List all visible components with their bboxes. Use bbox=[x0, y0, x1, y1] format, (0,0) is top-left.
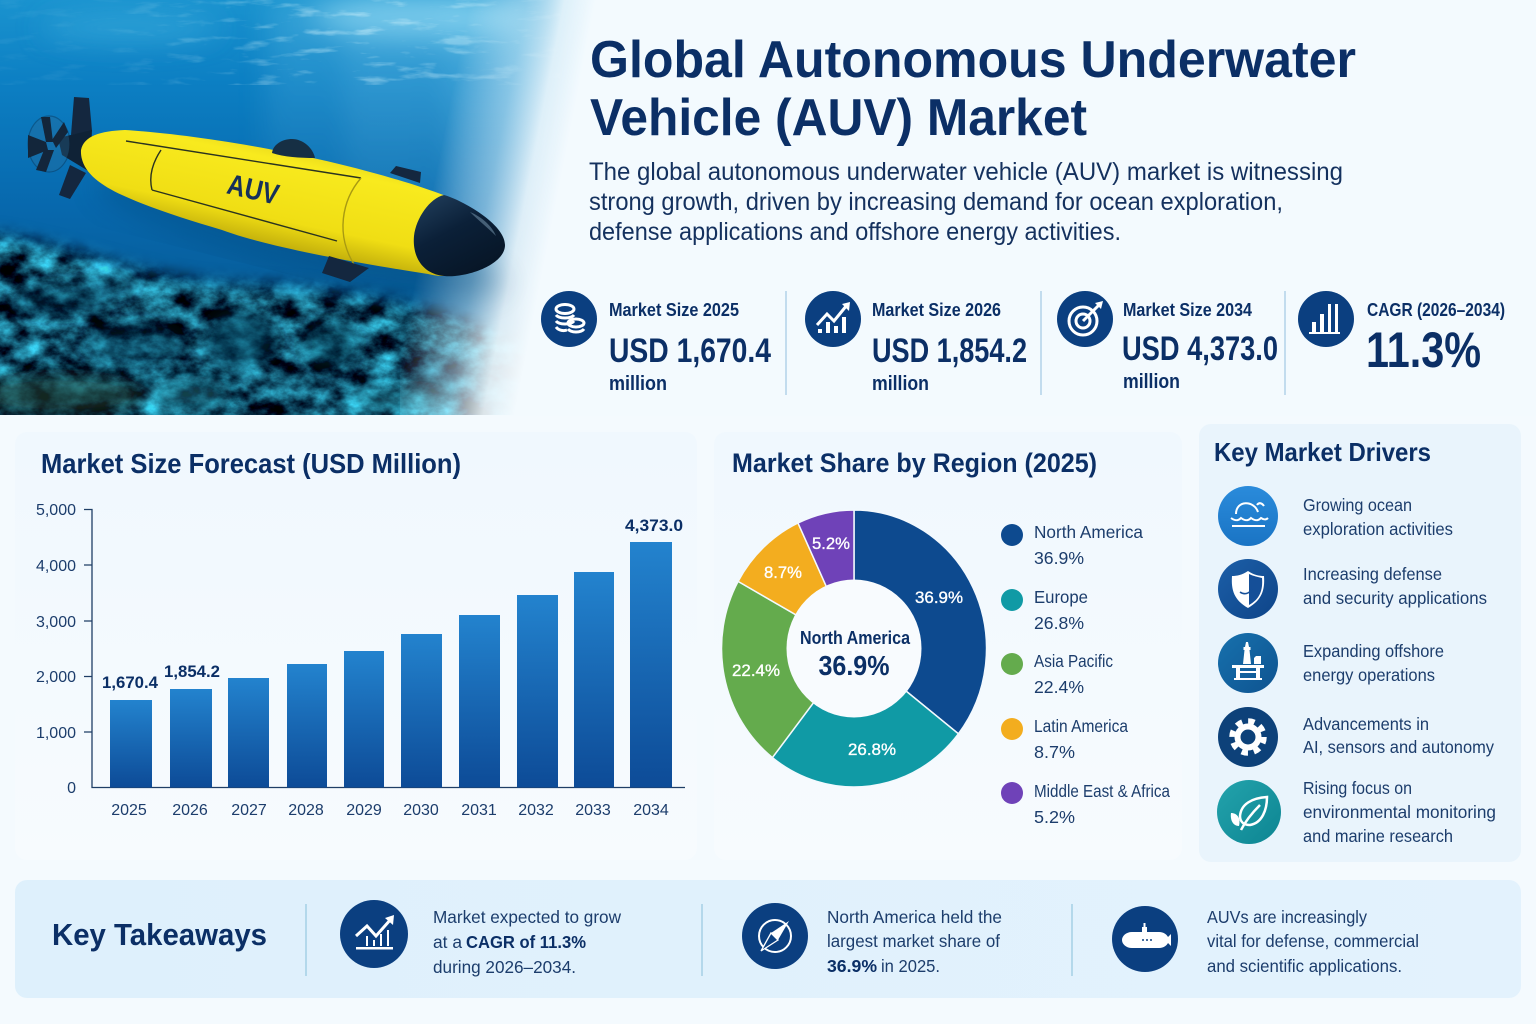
hero photo: AUV underwater bbox=[0, 0, 600, 416]
takeaway text: during 2026–2034. bbox=[433, 957, 576, 977]
icon: offshore rig bbox=[1218, 633, 1278, 693]
stat: CAGR: CAGR (2026–2034) bbox=[1367, 300, 1505, 320]
takeaway text: CAGR of 11.3% bbox=[466, 932, 586, 952]
legend: Asia Pacific bbox=[1034, 651, 1113, 671]
legend: 8.7% bbox=[1034, 742, 1075, 762]
nose cone bbox=[414, 195, 505, 276]
takeaway text: vital for defense, commercial bbox=[1207, 931, 1419, 951]
bar chart: 2029 bbox=[346, 802, 382, 819]
title bbox=[590, 31, 1356, 147]
bar chart: 2034 bbox=[633, 802, 669, 819]
driver text: and marine research bbox=[1303, 826, 1453, 846]
stat: market size 2034: Market Size 2034 bbox=[1123, 300, 1252, 320]
side fins bbox=[390, 166, 421, 183]
driver text: energy operations bbox=[1303, 665, 1435, 685]
legend: North America bbox=[1034, 522, 1143, 542]
driver text: exploration activities bbox=[1303, 519, 1453, 539]
chart heading: Market Size Forecast (USD Million) bbox=[41, 448, 461, 479]
bar chart: 2025 bbox=[111, 802, 147, 819]
donut chart: 8.7% bbox=[764, 563, 802, 582]
driver text: Expanding offshore bbox=[1303, 641, 1444, 661]
legend: Middle East & Africa bbox=[1034, 781, 1170, 801]
stat: CAGR bbox=[1298, 291, 1505, 378]
bar chart: 2031 bbox=[461, 802, 497, 819]
takeaways heading: Key Takeaways bbox=[52, 917, 267, 952]
bar chart: 2030 bbox=[403, 802, 439, 819]
bar chart: 1,670.4 bbox=[102, 673, 159, 692]
donut chart: 5.2% bbox=[812, 534, 850, 553]
sensor dome bbox=[272, 139, 315, 158]
bar chart bbox=[36, 502, 685, 819]
stat: market size 2026: million bbox=[872, 373, 929, 395]
stat: market size 2025: USD 1,670.4 bbox=[609, 332, 771, 370]
donut chart bbox=[722, 510, 987, 787]
stat: market size 2025 bbox=[541, 291, 771, 395]
icon: bars bbox=[1298, 291, 1354, 347]
AUV lettering: AUV bbox=[224, 169, 282, 212]
propeller bbox=[28, 116, 70, 172]
panel: market share by region bbox=[714, 432, 1182, 860]
intro text bbox=[589, 158, 1343, 246]
panel: key takeaways bbox=[15, 880, 1521, 998]
driver text: Rising focus on bbox=[1303, 778, 1412, 798]
driver text: AI, sensors and autonomy bbox=[1303, 737, 1494, 757]
icon: compass bbox=[742, 903, 808, 969]
driver text bbox=[1303, 778, 1496, 846]
bar chart: 2,000 bbox=[36, 669, 76, 686]
bar chart: 0 bbox=[67, 780, 76, 797]
driver text: environmental monitoring bbox=[1303, 802, 1496, 822]
intro text: The global autonomous underwater vehicle (AUV) market is witnessing bbox=[589, 158, 1343, 186]
donut chart: 26.8% bbox=[848, 740, 896, 759]
takeaway text: and scientific applications. bbox=[1207, 956, 1402, 976]
driver text: Growing ocean bbox=[1303, 495, 1412, 515]
icon: growth chart bbox=[340, 900, 408, 968]
donut chart: North America bbox=[800, 628, 911, 648]
takeaway text bbox=[433, 907, 621, 977]
legend: 36.9% bbox=[1034, 548, 1084, 568]
driver text: Increasing defense bbox=[1303, 564, 1442, 584]
takeaway text: North America held the bbox=[827, 907, 1002, 927]
donut chart: 36.9% bbox=[915, 588, 963, 607]
stat: market size 2025: Market Size 2025 bbox=[609, 300, 739, 320]
icon: shield bbox=[1218, 559, 1278, 619]
legend: 26.8% bbox=[1034, 613, 1084, 633]
takeaway text: in 2025. bbox=[881, 956, 940, 976]
bar chart: 3,000 bbox=[36, 614, 76, 631]
stat: market size 2026 bbox=[805, 291, 1027, 395]
icon: leaf bbox=[1217, 780, 1281, 844]
icon: rising chart bbox=[805, 291, 861, 347]
driver text bbox=[1303, 495, 1453, 539]
drivers heading: Key Market Drivers bbox=[1214, 437, 1431, 467]
takeaway text: at a bbox=[433, 932, 462, 952]
legend: Latin America bbox=[1034, 716, 1128, 736]
bar chart: 2033 bbox=[575, 802, 611, 819]
bar chart: 4,373.0 bbox=[625, 516, 683, 535]
takeaway text: Market expected to grow bbox=[433, 907, 621, 927]
driver text bbox=[1303, 714, 1494, 757]
bar chart: 2026 bbox=[172, 802, 208, 819]
driver text: and security applications bbox=[1303, 588, 1487, 608]
stat: market size 2025: million bbox=[609, 373, 667, 395]
driver text bbox=[1303, 641, 1444, 685]
legend: 5.2% bbox=[1034, 807, 1075, 827]
AUV vehicle bbox=[28, 97, 512, 319]
bar chart: 4,000 bbox=[36, 558, 76, 575]
driver text bbox=[1303, 564, 1487, 608]
stat: market size 2026: Market Size 2026 bbox=[872, 300, 1001, 320]
stat: market size 2034 bbox=[1057, 291, 1278, 393]
header background bbox=[0, 0, 1536, 416]
icon: target bbox=[1057, 291, 1113, 347]
takeaway text: largest market share of bbox=[827, 931, 1000, 951]
legend: 22.4% bbox=[1034, 677, 1084, 697]
title: Global Autonomous Underwater bbox=[590, 31, 1356, 89]
panel: market size forecast bbox=[15, 432, 697, 860]
donut chart: 36.9% bbox=[818, 650, 890, 681]
takeaway text: AUVs are increasingly bbox=[1207, 907, 1367, 927]
tail fins bbox=[58, 97, 92, 199]
stat: market size 2034: million bbox=[1123, 371, 1180, 393]
icon: ocean waves bbox=[1218, 486, 1278, 546]
stat: CAGR: 11.3% bbox=[1366, 322, 1481, 378]
intro text: strong growth, driven by increasing demand for ocean exploration, bbox=[589, 188, 1283, 216]
legend: Europe bbox=[1034, 587, 1088, 607]
icon: gear bbox=[1218, 707, 1278, 767]
panel: key market drivers bbox=[1199, 424, 1521, 862]
bar chart: 2032 bbox=[518, 802, 554, 819]
icon: submarine bbox=[1112, 906, 1178, 972]
legend bbox=[1001, 522, 1170, 827]
donut heading: Market Share by Region (2025) bbox=[732, 448, 1097, 478]
stat: market size 2034: USD 4,373.0 bbox=[1122, 330, 1278, 368]
intro text: defense applications and offshore energy activities. bbox=[589, 218, 1121, 246]
bar chart: 5,000 bbox=[36, 502, 76, 519]
takeaway text bbox=[827, 907, 1002, 976]
bar chart: 2027 bbox=[231, 802, 267, 819]
title: Vehicle (AUV) Market bbox=[590, 89, 1087, 147]
donut chart: 22.4% bbox=[732, 661, 780, 680]
icon: coins bbox=[541, 291, 597, 347]
takeaway text bbox=[1207, 907, 1419, 976]
stat: market size 2026: USD 1,854.2 bbox=[872, 332, 1027, 370]
takeaway text: 36.9% bbox=[827, 956, 877, 976]
bar chart: 2028 bbox=[288, 802, 324, 819]
bar chart: 1,854.2 bbox=[164, 662, 220, 681]
bar chart: 1,000 bbox=[36, 725, 76, 742]
driver text: Advancements in bbox=[1303, 714, 1429, 734]
